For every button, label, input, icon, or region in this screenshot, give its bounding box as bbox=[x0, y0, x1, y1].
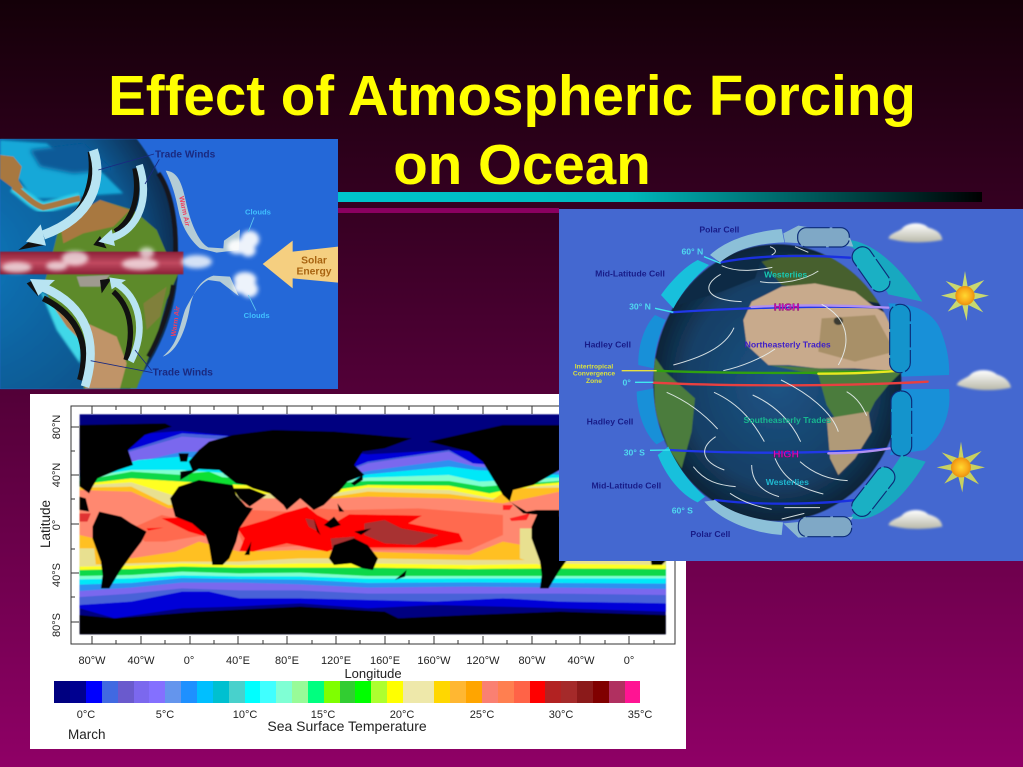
map frame and tick marks bbox=[71, 406, 675, 644]
cell labels: Hadley Cell bbox=[587, 417, 633, 427]
warm air labels: Warm Air bbox=[177, 196, 190, 227]
cell labels bbox=[584, 224, 739, 539]
warm air labels: Warm Air bbox=[171, 306, 182, 337]
latitude labels: 60° S bbox=[672, 506, 693, 516]
temperature scale labels: 0°C bbox=[77, 709, 95, 721]
clouds bbox=[888, 223, 1011, 529]
cell labels: Mid-Latitude Cell bbox=[591, 480, 661, 490]
pressure labels: HIGH bbox=[773, 450, 799, 461]
title: Effect of Atmospheric Forcing bbox=[108, 64, 916, 127]
pressure labels bbox=[773, 303, 800, 461]
latitude labels: 0° bbox=[623, 377, 631, 387]
longitude axis labels: 160°E bbox=[370, 655, 400, 667]
longitude axis labels: 0° bbox=[624, 655, 634, 667]
latitude axis labels: 80°N bbox=[51, 415, 63, 439]
longitude axis labels: 120°E bbox=[321, 655, 351, 667]
temperature scale labels: 5°C bbox=[156, 709, 174, 721]
title rule: magenta bar bbox=[338, 208, 559, 213]
solar energy arrow bbox=[263, 241, 338, 288]
month label: March bbox=[68, 727, 106, 742]
warm air ribbons bbox=[163, 171, 240, 357]
wind belt labels: Westerlies bbox=[766, 477, 809, 487]
latitude axis labels: Latitude bbox=[38, 500, 53, 548]
trade winds labels bbox=[153, 150, 216, 378]
longitude axis labels: 80°E bbox=[275, 655, 299, 667]
temperature scale labels: 30°C bbox=[549, 709, 573, 721]
latitude lines bbox=[653, 256, 928, 504]
latitude axis labels: 40°N bbox=[51, 463, 63, 487]
cell labels: Mid-Latitude Cell bbox=[595, 269, 665, 279]
cells: left bbox=[637, 229, 784, 535]
clouds labels bbox=[244, 207, 271, 320]
sun upper bbox=[941, 271, 989, 321]
longitude axis labels: 120°W bbox=[466, 655, 500, 667]
trade winds labels: Trade Winds bbox=[155, 150, 216, 161]
temperature scale labels: 35°C bbox=[628, 709, 652, 721]
globe section bbox=[0, 138, 179, 390]
latitude axis labels bbox=[38, 415, 63, 637]
latitude axis labels: 40°S bbox=[51, 563, 63, 587]
panel: sea surface temperature map bbox=[30, 394, 686, 749]
latitude labels: 30° S bbox=[624, 448, 645, 458]
clouds labels: Clouds bbox=[245, 207, 271, 216]
panel: trade winds and solar energy globe bbox=[0, 138, 338, 390]
longitude axis labels: 40°W bbox=[127, 655, 155, 667]
temperature scale labels bbox=[77, 709, 652, 721]
title rule: teal gradient bar bbox=[338, 192, 982, 202]
warm air labels bbox=[171, 196, 190, 337]
scale title: Sea Surface Temperature bbox=[267, 718, 427, 734]
temperature scale labels: 25°C bbox=[470, 709, 494, 721]
wind belt labels: Northeasterly Trades bbox=[745, 339, 831, 349]
cell labels: Hadley Cell bbox=[584, 340, 631, 350]
latitude labels: 30° N bbox=[629, 301, 651, 311]
longitude axis labels: 80°W bbox=[518, 655, 546, 667]
longitude axis labels: Longitude bbox=[344, 666, 402, 681]
earth bbox=[653, 244, 902, 521]
wind belt labels bbox=[744, 270, 831, 487]
label lines bbox=[91, 154, 256, 373]
trade winds labels: Trade Winds bbox=[153, 367, 213, 378]
intertropical convergence zone label: Convergence bbox=[573, 371, 615, 378]
longitude axis labels: 40°E bbox=[226, 655, 250, 667]
solar energy label: Solar bbox=[301, 255, 327, 266]
longitude axis labels: 40°W bbox=[567, 655, 595, 667]
temperature scale labels: 15°C bbox=[311, 709, 335, 721]
world map of sea surface temperature bbox=[80, 414, 675, 634]
latitude axis labels: 80°S bbox=[51, 613, 63, 637]
longitude axis labels: 80°W bbox=[78, 655, 106, 667]
longitude axis labels: 160°W bbox=[417, 655, 451, 667]
longitude axis labels bbox=[78, 655, 634, 681]
surface wind arrows bbox=[667, 247, 867, 519]
latitude axis labels: 0° bbox=[51, 520, 63, 530]
panel: global atmospheric circulation globe bbox=[559, 209, 1023, 561]
intertropical convergence zone label: Zone bbox=[586, 378, 602, 385]
longitude axis labels: 0° bbox=[184, 655, 194, 667]
temperature scale labels: 20°C bbox=[390, 709, 414, 721]
title: on Ocean bbox=[393, 133, 651, 196]
wind belt labels: Southeasterly Trades bbox=[744, 415, 831, 425]
cell labels: Polar Cell bbox=[690, 529, 730, 539]
cell labels: Polar Cell bbox=[699, 224, 739, 234]
wind arrows bbox=[18, 150, 143, 387]
solar energy label: Energy bbox=[296, 266, 332, 277]
intertropical convergence zone label: Intertropical bbox=[575, 364, 613, 371]
clouds labels: Clouds bbox=[244, 311, 270, 320]
temperature scale labels: 10°C bbox=[233, 709, 257, 721]
latitude pointer arrows bbox=[622, 257, 721, 450]
cells: right with circulation loops bbox=[783, 226, 949, 538]
temperature colour scale bbox=[54, 681, 640, 703]
latitude labels: 60° N bbox=[681, 246, 703, 256]
wind belt labels: Westerlies bbox=[764, 270, 807, 280]
clouds bbox=[227, 231, 259, 297]
pressure labels: HIGH bbox=[774, 303, 800, 314]
sun lower bbox=[937, 442, 985, 492]
equatorial red band with clouds bbox=[0, 247, 212, 274]
latitude labels bbox=[623, 246, 703, 516]
